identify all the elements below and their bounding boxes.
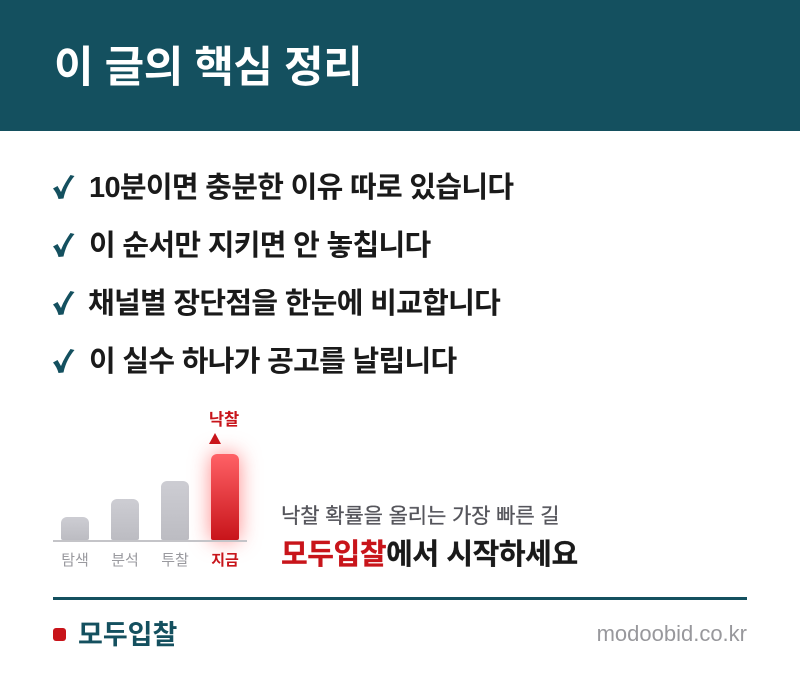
item 4: 이 실수 하나가 공고를 날립니다 — [89, 346, 457, 378]
bar: 투찰 — [161, 481, 189, 540]
title: 이 글의 핵심 정리 — [54, 44, 362, 92]
footer url: modoobid.co.kr — [597, 621, 747, 646]
bar: 지금 — [211, 454, 239, 540]
bar: 분석 — [111, 499, 139, 540]
axis line — [53, 540, 247, 542]
bar: 탐색 — [61, 517, 89, 540]
footer divider — [53, 597, 747, 600]
item 2: 이 순서만 지키면 안 놓칩니다 — [89, 230, 431, 262]
header banner — [0, 0, 800, 131]
callout headline: 모두입찰에서 시작하세요 — [281, 539, 578, 571]
item 3: 채널별 장단점을 한눈에 비교합니다 — [88, 288, 500, 320]
brand square — [53, 628, 66, 641]
label 분석: 분석 — [111, 552, 139, 569]
up arrow marker — [209, 433, 221, 444]
낙찰 label: 낙찰 — [209, 411, 239, 429]
callout subtitle: 낙찰 확률을 올리는 가장 빠른 길 — [281, 505, 560, 528]
bars — [61, 440, 254, 554]
label 지금: 지금 — [211, 552, 239, 569]
brand name: 모두입찰 — [78, 620, 177, 650]
item 1: 10분이면 충분한 이유 따로 있습니다 — [89, 172, 513, 204]
checklist — [53, 172, 514, 378]
callout — [281, 505, 578, 571]
axis labels — [61, 552, 239, 569]
bar chart — [53, 410, 254, 554]
label 투찰: 투찰 — [161, 552, 189, 569]
label 탐색: 탐색 — [61, 552, 89, 569]
footer brand — [53, 620, 177, 650]
